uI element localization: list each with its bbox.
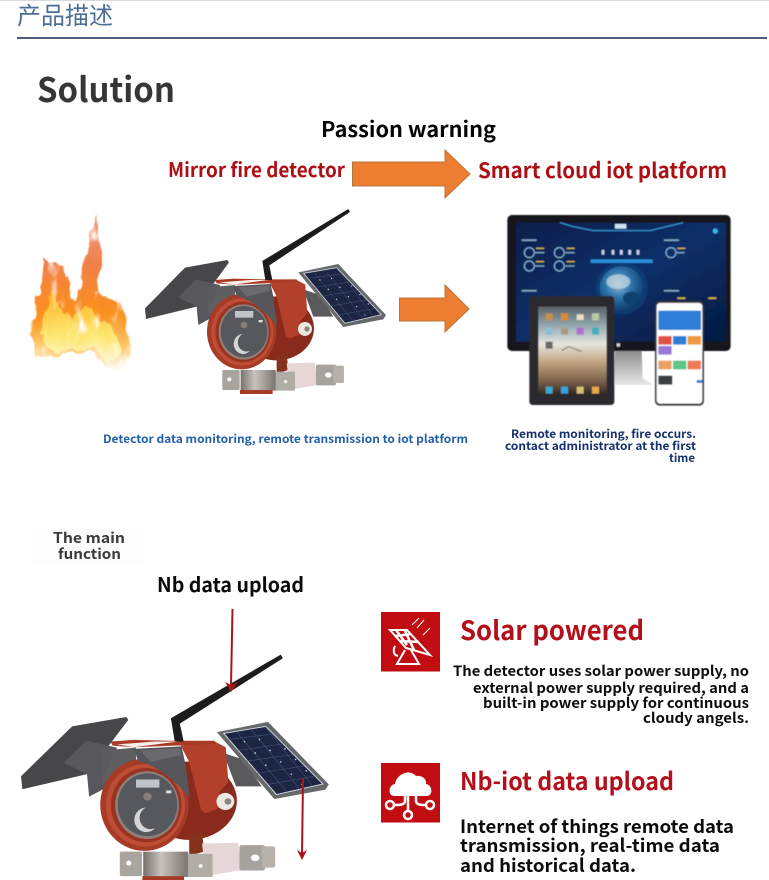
text: Nb-iot description: and historical data. xyxy=(460,852,636,878)
text: solar description: built-in power supply for continuous xyxy=(483,693,749,713)
label: Mirror fire detector: Mirror fire detector xyxy=(168,154,345,183)
title: Solution: Solution xyxy=(37,63,175,112)
caption: detector data monitoring: Detector data monitoring, remote transmission to iot platform xyxy=(103,431,468,447)
arrow: detector to platform xyxy=(352,150,470,198)
label: The main function xyxy=(32,527,144,566)
text: solar description: external power supply required, and a xyxy=(473,678,749,698)
caption: remote monitoring: contact administrator at the first xyxy=(505,438,696,454)
device: solar fire detector, large xyxy=(21,655,329,880)
icon: solar panel xyxy=(381,612,440,672)
text: solar description xyxy=(453,661,749,728)
monitor xyxy=(507,215,731,351)
arrow: detector to devices xyxy=(400,285,469,332)
icon: cloud network xyxy=(381,763,440,822)
text: Nb-iot description: Internet of things remote data xyxy=(460,813,734,839)
caption: remote monitoring xyxy=(505,426,696,466)
device: solar fire detector xyxy=(145,209,386,394)
arrow: data upload to antenna xyxy=(225,609,238,692)
phone xyxy=(655,301,704,406)
caption: remote monitoring: time xyxy=(669,450,695,466)
arrow: solar panel downward xyxy=(297,778,307,860)
tablet xyxy=(529,296,614,405)
icon: fire xyxy=(32,215,130,370)
label: The main function: The main xyxy=(53,527,125,548)
devices: monitor, tablet, phone xyxy=(507,215,731,406)
label: Smart cloud iot platform: Smart cloud iot platform xyxy=(478,155,727,185)
text: solar description: The detector uses solar power supply, no xyxy=(453,661,749,681)
label: The main function: function xyxy=(58,543,121,564)
caption: remote monitoring: Remote monitoring, fire occurs. xyxy=(511,426,696,442)
text: Nb-iot description xyxy=(460,813,734,878)
text: Nb-iot description: transmission, real-time data xyxy=(460,832,720,858)
monitor stand xyxy=(612,350,653,385)
heading underline xyxy=(17,37,767,39)
label: Passion warning: Passion warning xyxy=(321,113,496,144)
text: solar description: cloudy angels. xyxy=(643,708,749,728)
label: Nb data upload: Nb data upload xyxy=(157,569,304,598)
top edge line xyxy=(0,0,769,1)
heading: Solar powered: Solar powered xyxy=(460,609,644,648)
heading: Nb-iot data upload: Nb-iot data upload xyxy=(460,763,674,798)
